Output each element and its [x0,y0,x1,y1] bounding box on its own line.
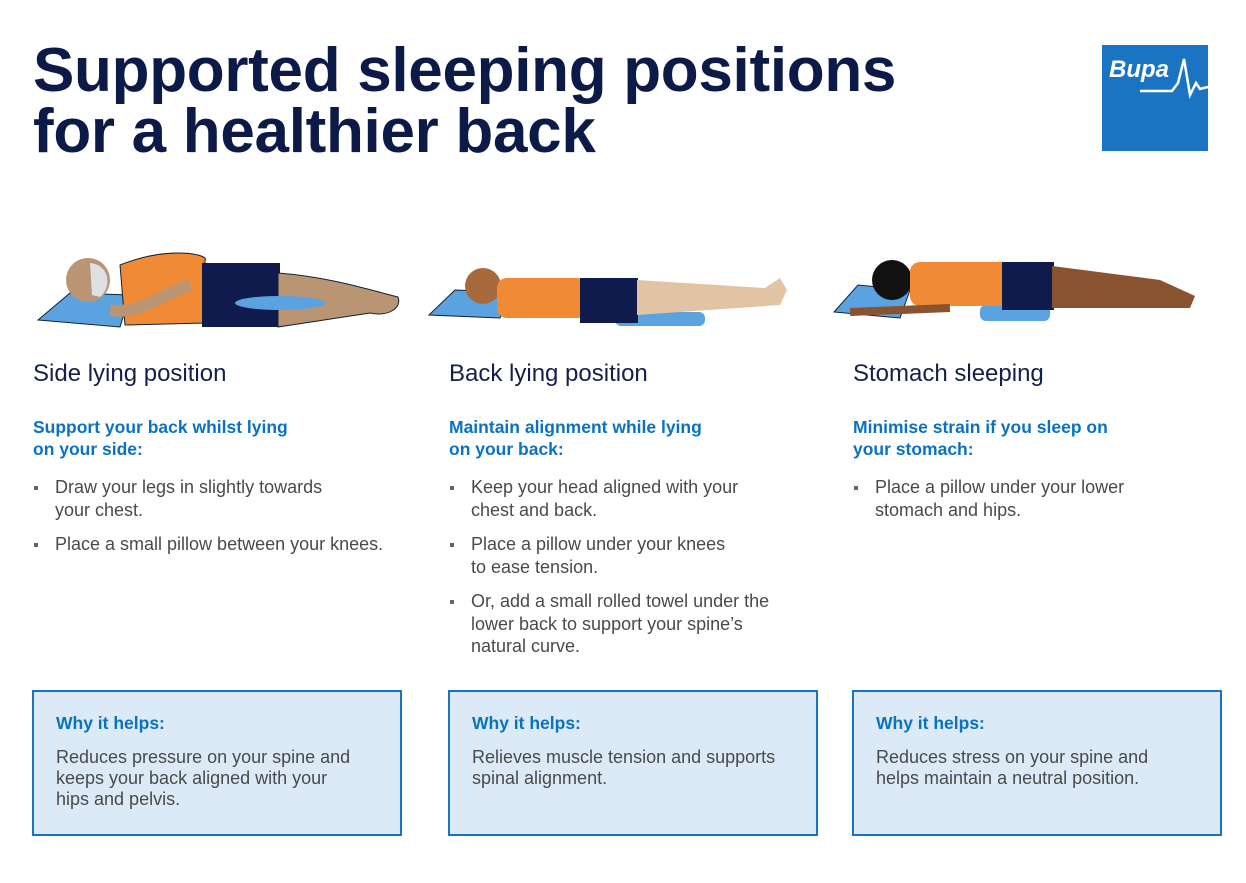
box 2 [448,690,818,836]
column 2: lower back to support your spine’s [471,614,743,634]
column 2: on your back: [449,439,564,459]
column 2: chest and back. [471,500,597,520]
column 3: Place a pillow under your lower [875,477,1124,497]
illustration: back lying [428,268,787,326]
logo: Bupa [1109,56,1169,83]
column 3 [853,360,1124,520]
box 1 [32,690,402,836]
column 1: Support your back whilst lying [33,417,288,437]
column 3: Stomach sleeping [853,360,1044,387]
column 1: Draw your legs in slightly towards [55,477,322,497]
box 2: spinal alignment. [472,768,607,788]
column 1 [33,360,383,554]
box 3 [852,690,1222,836]
column 1: Place a small pillow between your knees. [55,534,383,554]
box 1: Why it helps: [56,713,165,733]
box 3: helps maintain a neutral position. [876,768,1139,788]
box 3: Reduces stress on your spine and [876,747,1148,767]
illustration: stomach [833,260,1195,321]
column 3: Minimise strain if you sleep on [853,417,1108,437]
column 2: Back lying position [449,360,648,387]
illustration: side lying [36,252,400,328]
column 2: to ease tension. [471,556,598,576]
column 2 [449,360,769,656]
column 2: Keep your head aligned with your [471,477,738,497]
title [33,36,896,166]
title: for a healthier back [33,97,596,166]
box 1: hips and pelvis. [56,789,180,809]
box 2: Relieves muscle tension and supports [472,747,775,767]
box 3: Why it helps: [876,713,985,733]
column 1: your chest. [55,500,143,520]
column 2: Place a pillow under your knees [471,534,725,554]
column 2: Maintain alignment while lying [449,417,702,437]
column 2: natural curve. [471,636,580,656]
box 2: Why it helps: [472,713,581,733]
column 3: your stomach: [853,439,974,459]
box 1: keeps your back aligned with your [56,768,327,788]
column 3: stomach and hips. [875,500,1021,520]
column 1: on your side: [33,439,143,459]
column 2: Or, add a small rolled towel under the [471,591,769,611]
logo [1102,45,1208,151]
title: Supported sleeping positions [33,36,896,105]
column 1: Side lying position [33,360,226,387]
box 1: Reduces pressure on your spine and [56,747,350,767]
